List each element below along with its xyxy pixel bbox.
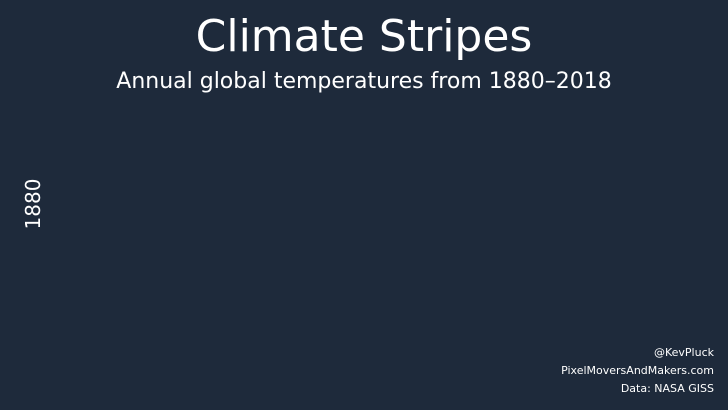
credits: Data: NASA GISS	[621, 382, 714, 395]
credits	[561, 346, 714, 395]
subtitle: Annual global temperatures from 1880–2018	[116, 69, 612, 94]
credits: @KevPluck	[654, 346, 714, 359]
credits: PixelMoversAndMakers.com	[561, 364, 714, 377]
title: Climate Stripes	[196, 11, 532, 62]
year label: 1880	[21, 179, 45, 229]
